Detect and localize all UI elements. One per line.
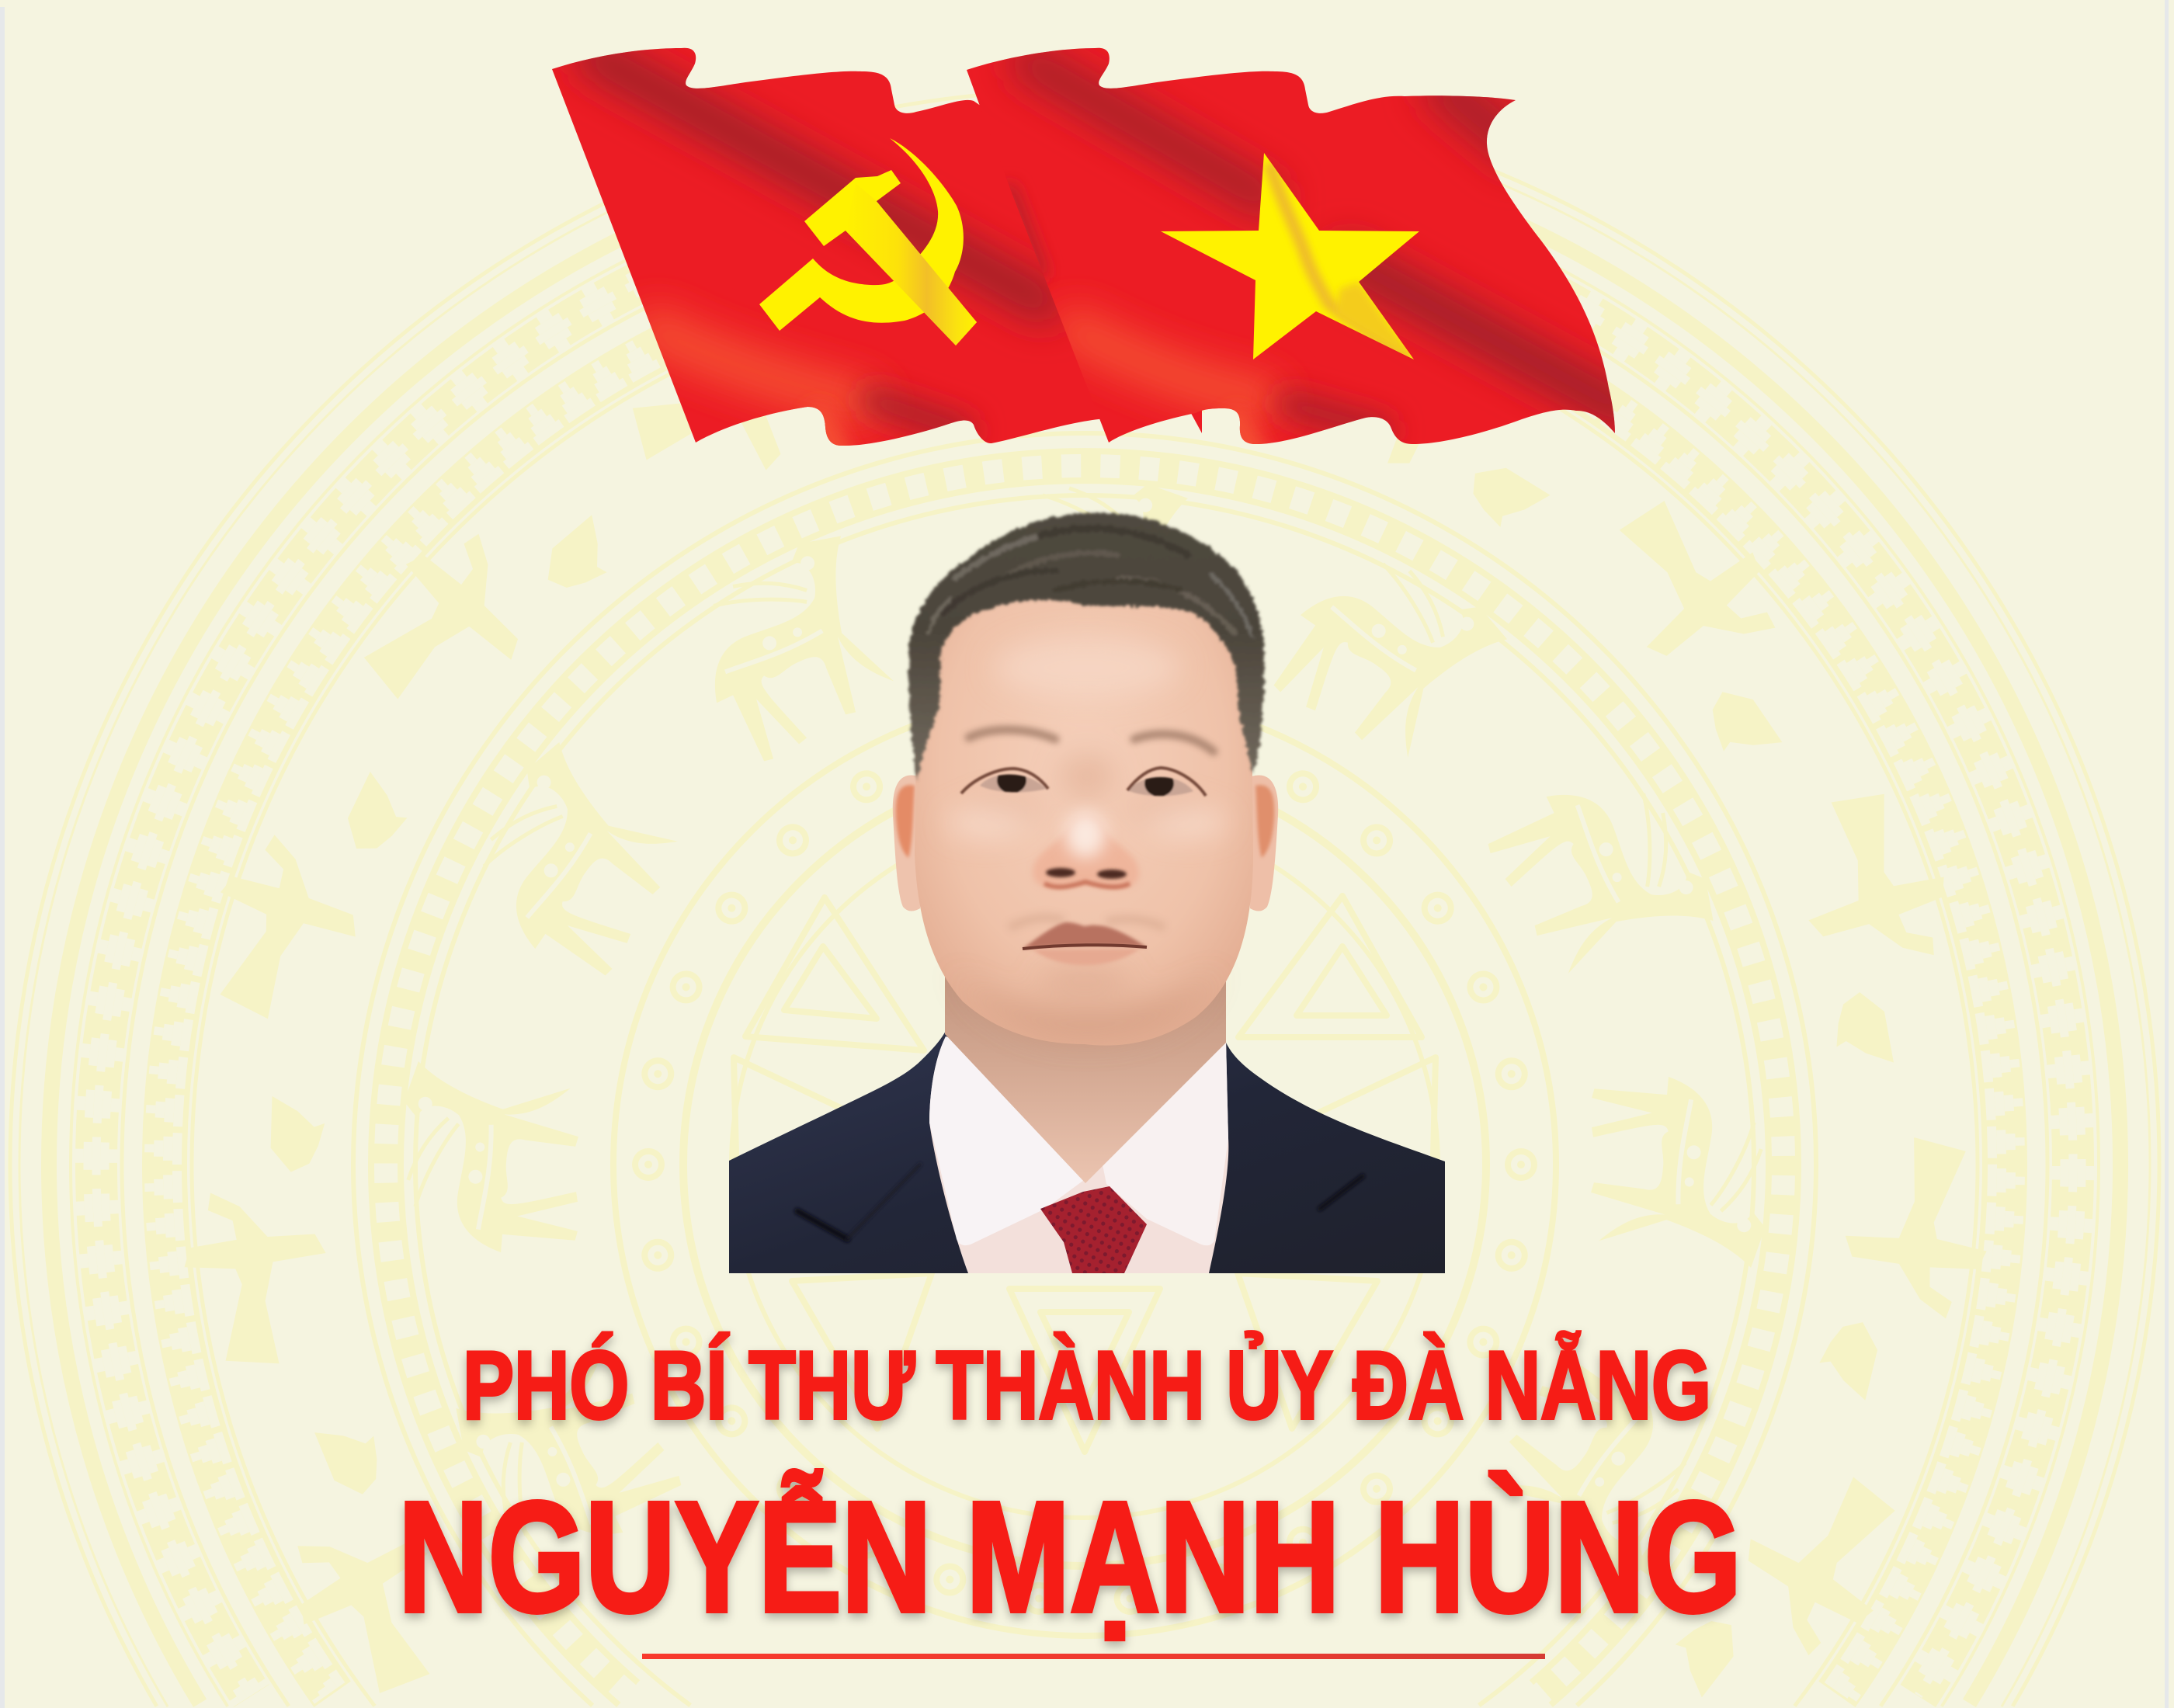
hair (908, 512, 1264, 779)
icon: hammer and sickle (759, 138, 977, 345)
face shading (947, 637, 1227, 1040)
left ear (893, 775, 920, 911)
party flag (552, 48, 1202, 446)
headline: name: NGUYỄN MẠNH HÙNG (398, 1469, 1742, 1644)
left collar (929, 1036, 1087, 1245)
lapel slits (797, 1165, 1363, 1239)
state flag (967, 48, 1615, 444)
tie (1040, 1186, 1147, 1273)
right eye (1127, 768, 1206, 797)
icon: yellow star (1161, 153, 1419, 359)
right ear (1250, 775, 1278, 911)
face (915, 563, 1253, 1046)
eyebrows (969, 730, 1214, 752)
right collar (1103, 1043, 1228, 1245)
shirt (929, 1036, 1228, 1273)
neck (945, 977, 1226, 1183)
portrait (729, 512, 1445, 1273)
nose (1033, 811, 1139, 887)
title (398, 1331, 1742, 1644)
suit jacket (729, 1029, 1445, 1273)
subtitle: position: PHÓ BÍ THƯ THÀNH ỦY ĐÀ NẴNG (463, 1331, 1711, 1439)
mouth (1009, 918, 1165, 965)
underline rule (642, 1654, 1545, 1659)
left eye (961, 767, 1048, 793)
